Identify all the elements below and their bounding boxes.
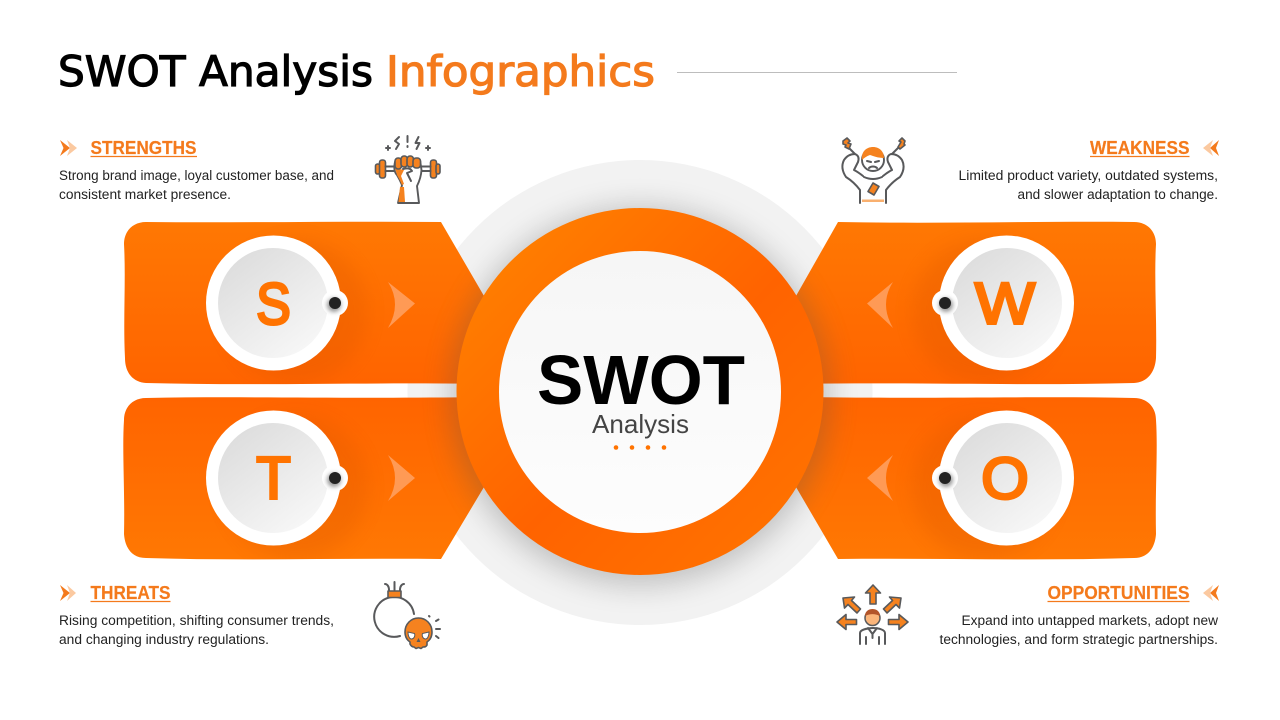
letter circle T: T bbox=[256, 442, 292, 514]
letter circle W bbox=[932, 236, 1074, 370]
heading: THREATS bbox=[90, 583, 170, 603]
arrow W bbox=[867, 282, 893, 328]
text block: strengths: consistent market presence. bbox=[59, 187, 231, 202]
text block: weakness bbox=[958, 138, 1219, 202]
arrow O bbox=[867, 455, 893, 501]
text block: threats: and changing industry regulations. bbox=[59, 632, 269, 647]
text block: strengths bbox=[59, 138, 334, 202]
title: Infographics bbox=[386, 47, 655, 96]
letter circle S bbox=[206, 236, 348, 370]
center subheading: Analysis bbox=[592, 409, 689, 439]
panel: threats bbox=[123, 397, 484, 559]
letter circle W: W bbox=[975, 272, 1035, 336]
description: Expand into untapped markets, adopt new bbox=[962, 613, 1218, 628]
chevrons bbox=[1203, 140, 1219, 156]
description: Limited product variety, outdated systems, bbox=[958, 168, 1218, 183]
arrow S bbox=[388, 282, 415, 328]
panel: weakness bbox=[796, 222, 1156, 384]
letter circle S: S bbox=[256, 272, 291, 337]
letter circle O bbox=[932, 410, 1074, 546]
text block: opportunities: technologies, and form strategic partnerships. bbox=[940, 632, 1218, 647]
icon: frustrated man bbox=[842, 138, 905, 203]
center heading: SWOT bbox=[537, 341, 745, 419]
arrow T bbox=[388, 455, 415, 501]
text block: weakness: and slower adaptation to change. bbox=[1018, 187, 1218, 202]
title bbox=[58, 47, 655, 96]
letter circle O: O bbox=[981, 446, 1029, 512]
description: Rising competition, shifting consumer trends, bbox=[59, 613, 334, 628]
text block: opportunities bbox=[940, 583, 1219, 647]
icon: person with arrows bbox=[837, 585, 908, 644]
letter circle T bbox=[206, 410, 348, 546]
chevrons bbox=[60, 585, 76, 601]
text block: threats bbox=[59, 583, 334, 647]
heading: OPPORTUNITIES bbox=[1048, 583, 1190, 603]
background gray circle bbox=[408, 160, 872, 625]
icon: bomb skull bbox=[374, 582, 440, 648]
chevrons bbox=[1203, 585, 1219, 601]
chevrons bbox=[60, 140, 77, 156]
center circle bbox=[450, 206, 830, 586]
panel: strengths bbox=[124, 222, 484, 384]
panel: opportunities bbox=[796, 397, 1157, 559]
icon: dumbbell fist bbox=[376, 136, 440, 203]
heading: STRENGTHS bbox=[90, 138, 196, 158]
heading: WEAKNESS bbox=[1090, 138, 1190, 158]
center dots bbox=[614, 445, 666, 450]
description: Strong brand image, loyal customer base, and bbox=[59, 168, 334, 183]
title: SWOT Analysis bbox=[58, 47, 373, 96]
